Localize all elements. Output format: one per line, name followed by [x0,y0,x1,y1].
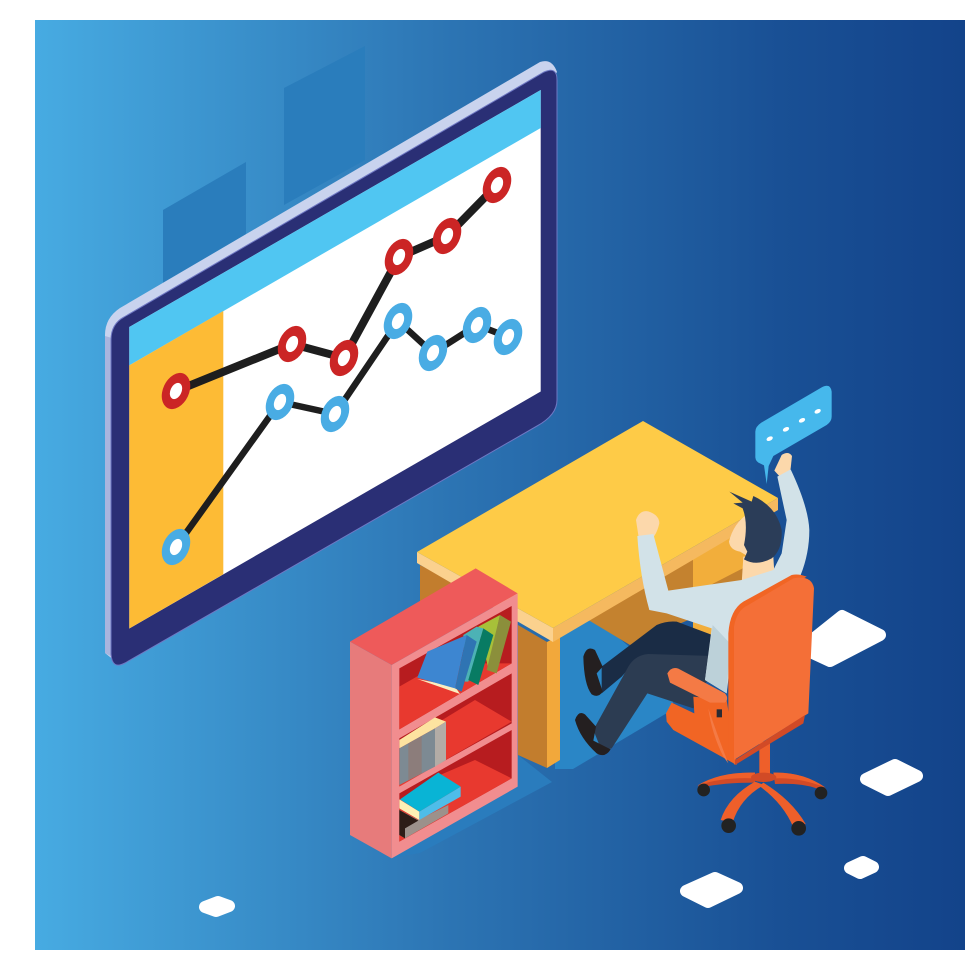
monitor light edge [105,61,557,665]
desk top edges [417,552,553,642]
yellow sidebar [129,311,223,628]
chair seat [666,697,737,765]
raised hand [774,453,792,483]
hair [729,492,782,563]
monitor with line chart [105,61,557,665]
chair column [759,742,770,777]
red data series [156,162,517,414]
screen header band [129,90,541,365]
lower compartment [399,730,512,842]
front leg [575,654,713,755]
grey books [399,717,446,785]
floor tiles [205,616,917,911]
upper compartment [399,606,512,729]
desk back panels [585,520,755,645]
person and chair [575,386,832,765]
fist [636,511,659,540]
desk top [417,421,778,628]
background bars [163,46,365,348]
shelf top [350,568,518,665]
chair base hub [751,773,776,782]
neck [742,557,775,583]
speech bubble [755,386,832,484]
olive book [478,615,511,673]
face [729,513,750,557]
stacked books [399,773,461,838]
chair base and column [697,742,827,836]
chair back [728,574,814,765]
middle compartment [399,673,512,787]
chair base legs [698,773,826,827]
back leg [583,621,717,696]
shelf front frame [392,593,518,858]
teal book [463,627,493,685]
desk [417,421,778,768]
chair wheels [697,784,827,836]
desk rear left leg [420,565,470,610]
monitor navy frame [111,70,557,665]
shelf side [350,642,392,858]
shirt [637,469,809,693]
shirt shadow [705,625,730,693]
floor shadow under desk and shelf [392,615,680,858]
chair armrest [667,668,728,763]
blue book [417,635,477,694]
blue data series [156,298,528,570]
desk front leg [518,625,560,768]
screen [129,90,541,628]
bookshelf [350,568,518,858]
